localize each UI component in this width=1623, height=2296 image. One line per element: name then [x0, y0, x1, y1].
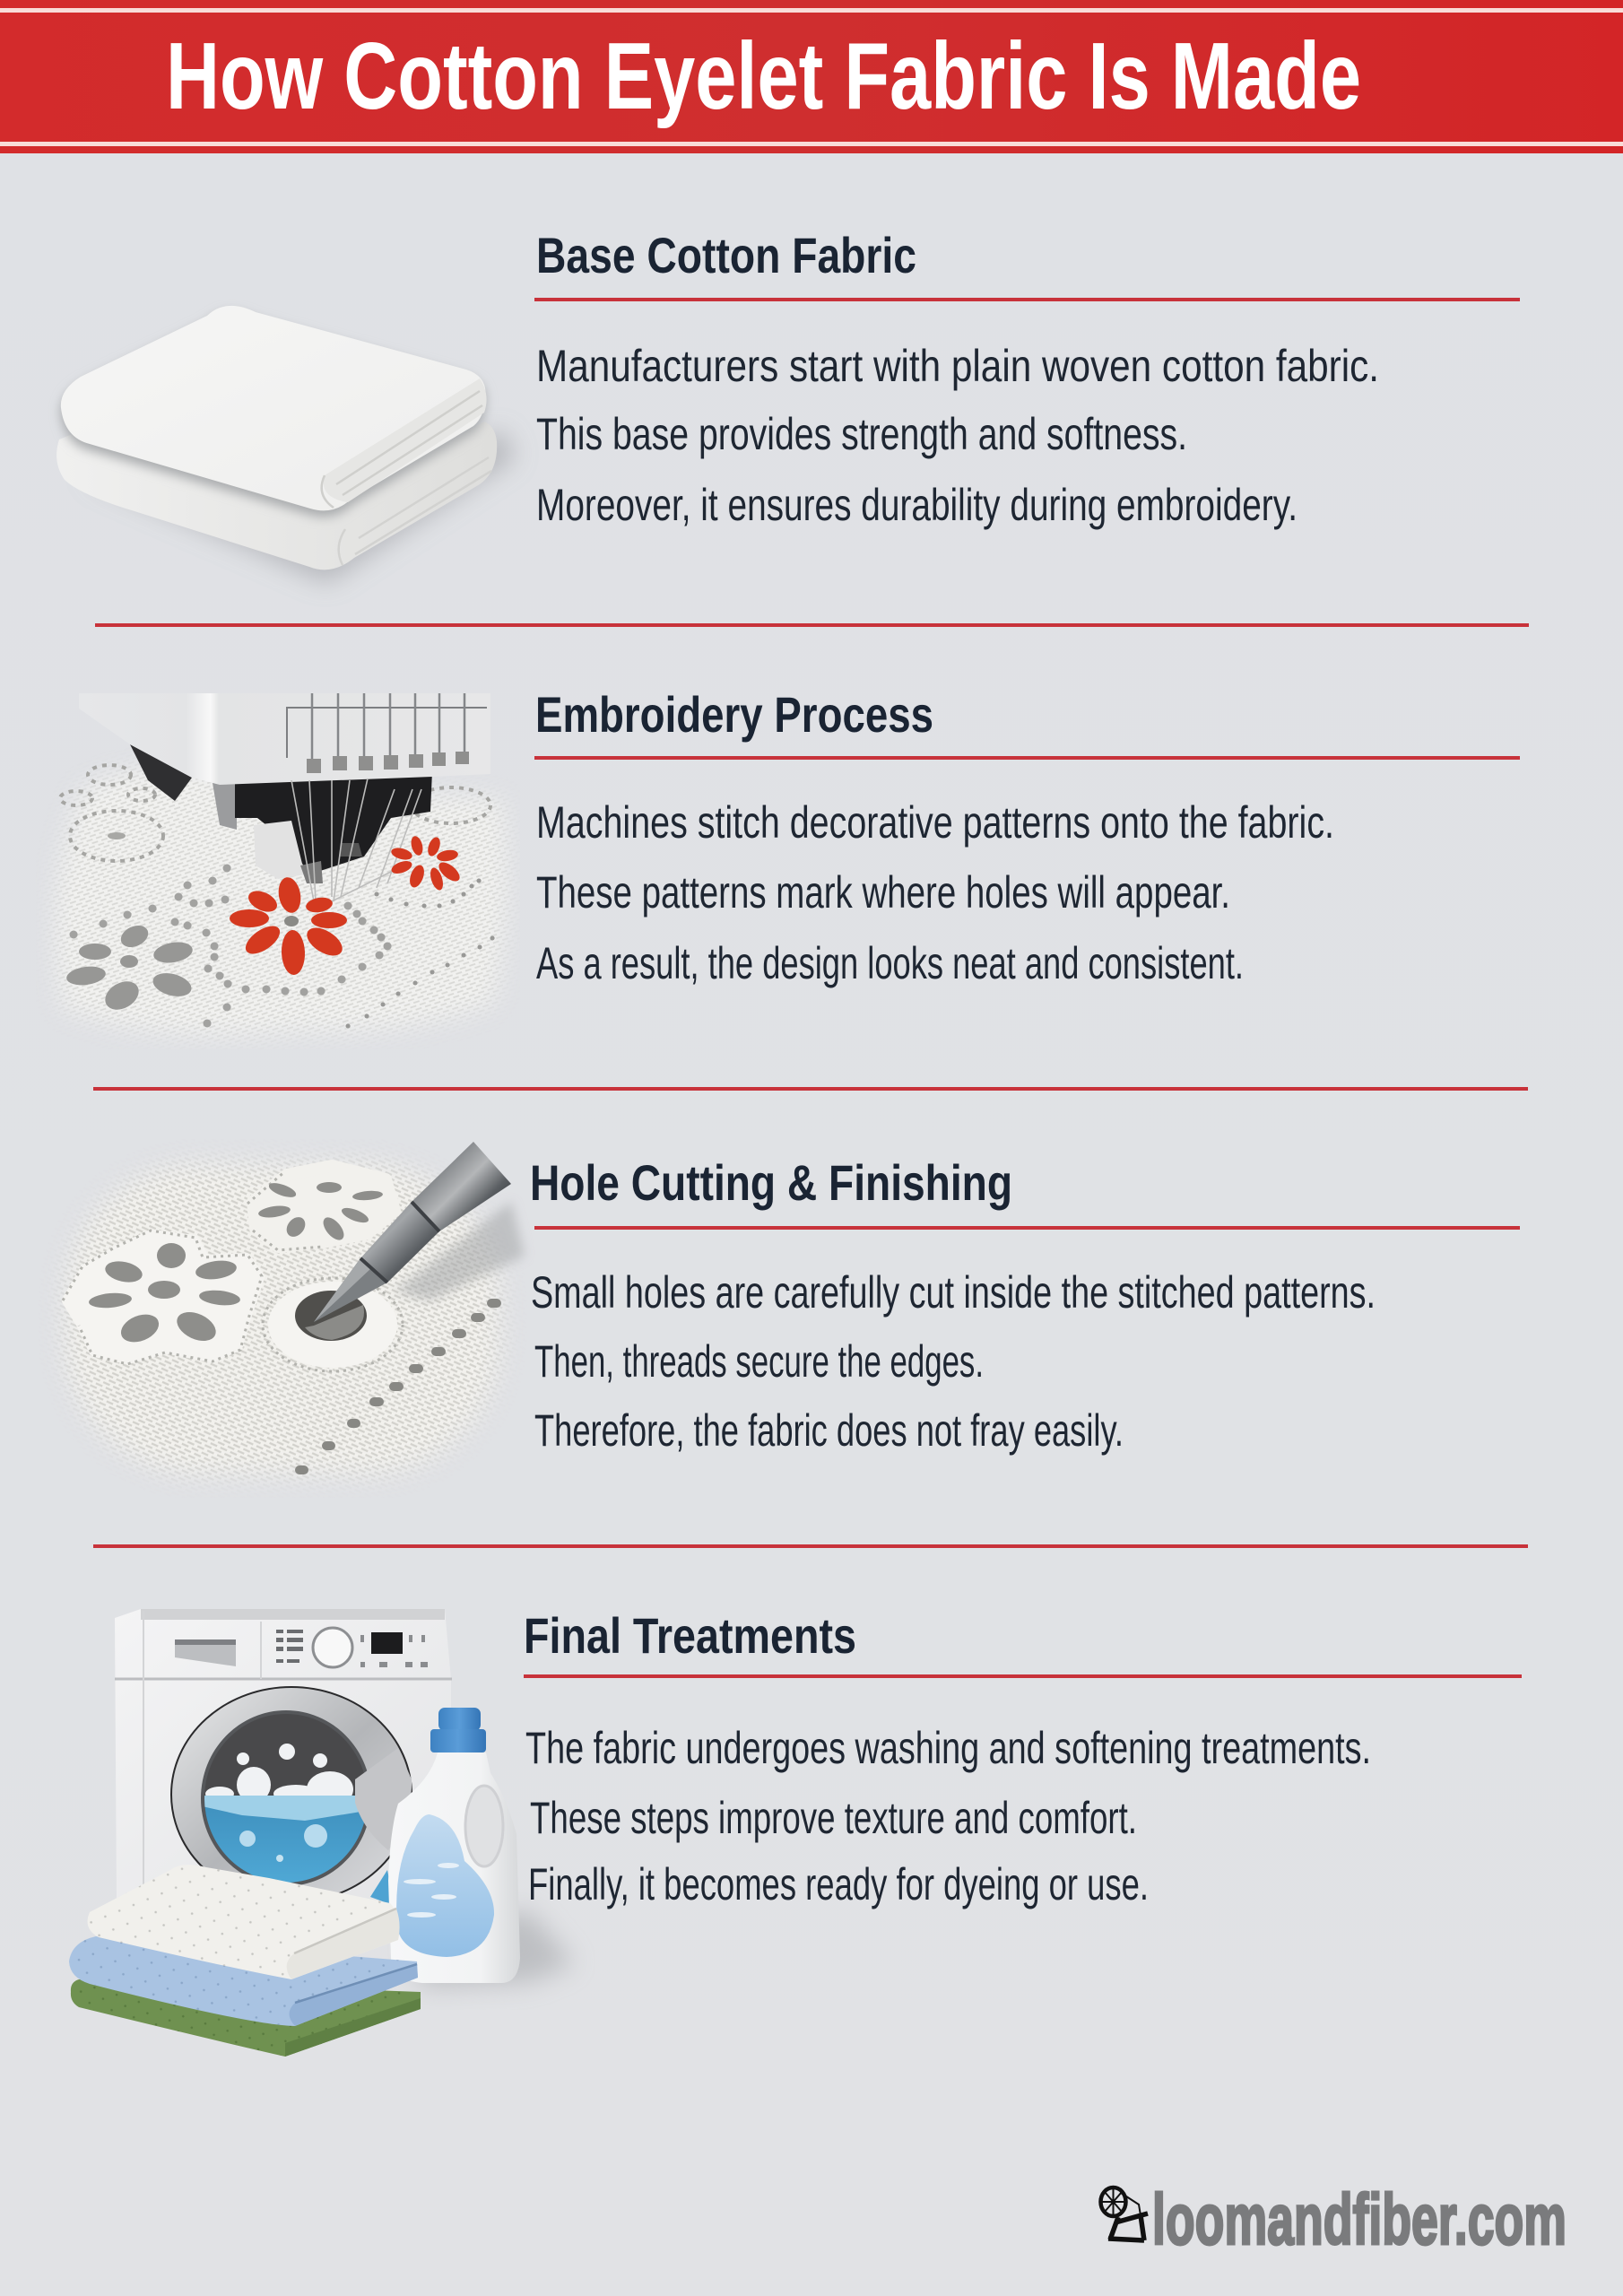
red flowers — [230, 835, 463, 975]
text block: These steps improve texture and comfort. — [530, 1793, 1137, 1843]
icon: folded white towels — [56, 306, 516, 583]
icon: spinning wheel — [1101, 2187, 1148, 2240]
grey flower and dots — [65, 921, 195, 1015]
raised flower outlines — [68, 1166, 397, 1368]
text block: The fabric undergoes washing and softening treatments. — [525, 1723, 1371, 1773]
text block: As a result, the design looks neat and consistent. — [536, 938, 1244, 988]
text block: Manufacturers start with plain woven cotton fabric. — [536, 341, 1379, 391]
blue fabric — [69, 1936, 418, 2026]
text block: This base provides strength and softness. — [536, 409, 1187, 459]
icon: cutting tool over eyelet fabric — [59, 1142, 526, 1480]
heading rule — [534, 756, 1520, 760]
white fabric — [88, 1865, 399, 1979]
text block: Therefore, the fabric does not fray easily. — [534, 1405, 1124, 1456]
heading rule — [524, 1674, 1522, 1678]
machine body — [79, 693, 490, 785]
green fabric — [71, 1979, 421, 2057]
text block — [536, 797, 1334, 988]
threads — [291, 778, 421, 901]
pen shadow — [395, 1202, 525, 1300]
heading rule — [534, 1226, 1520, 1230]
heading: Final Treatments — [524, 1607, 856, 1664]
faint pattern marks — [60, 765, 490, 861]
text block — [525, 1723, 1371, 1909]
eyelet holes — [88, 1180, 383, 1347]
cut hole — [295, 1291, 367, 1341]
text block: Small holes are carefully cut inside the stitched patterns. — [531, 1267, 1376, 1318]
title banner — [0, 0, 1623, 153]
heading: Base Cotton Fabric — [536, 227, 916, 283]
detergent bottle — [388, 1708, 574, 1987]
heading: Hole Cutting & Finishing — [530, 1154, 1012, 1211]
washing machine — [115, 1609, 452, 1906]
panel: final treatments — [69, 1607, 1522, 2057]
text block: Then, threads secure the edges. — [534, 1336, 984, 1387]
text block: Finally, it becomes ready for dyeing or use. — [528, 1859, 1149, 1909]
logo: loomandfiber.com — [1101, 2179, 1567, 2259]
text block: Machines stitch decorative patterns onto the fabric. — [536, 797, 1334, 848]
text block — [531, 1267, 1376, 1456]
text block: Moreover, it ensures durability during embroidery. — [536, 480, 1298, 530]
panel: base cotton fabric — [56, 227, 1520, 583]
text block: These patterns mark where holes will appear. — [536, 867, 1230, 918]
heading rule — [534, 298, 1520, 301]
panel: hole cutting and finishing — [36, 1139, 1520, 1498]
icon: embroidery machine stitching fabric — [36, 693, 520, 1049]
icon: washing machine, detergent bottle and folded fabrics — [69, 1609, 574, 2057]
cutting tool — [314, 1258, 387, 1322]
text block — [536, 341, 1379, 530]
panel: embroidery process — [36, 686, 1520, 1049]
heading: Embroidery Process — [535, 686, 933, 743]
machine underside — [130, 744, 192, 801]
trail of small eyelets — [299, 1303, 497, 1470]
